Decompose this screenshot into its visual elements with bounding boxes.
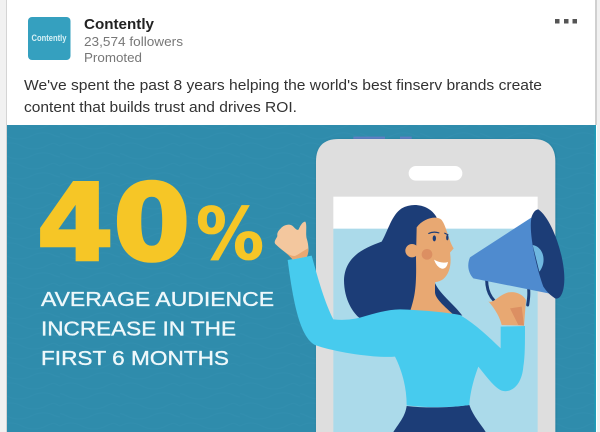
follower count: 23,574 followers	[84, 34, 184, 49]
panel: teal ad background	[7, 125, 596, 432]
icon: more options dots	[555, 19, 577, 24]
post copy: We've spent the past 8 years helping the world's best finserv brands create	[24, 78, 542, 94]
phone	[316, 137, 555, 432]
icon: Contently logo: Contently	[32, 33, 66, 43]
statistic description: INCREASE IN THE	[41, 318, 236, 340]
statistic description: AVERAGE AUDIENCE	[41, 288, 274, 311]
headline statistic 40%: %	[196, 192, 264, 276]
icon: thumbs-up hand	[275, 222, 308, 259]
post copy	[24, 78, 542, 116]
icon: Contently logo	[28, 17, 70, 60]
icon: megaphone	[468, 209, 564, 326]
company name: Contently	[84, 16, 155, 33]
headline statistic 40%	[37, 162, 264, 284]
post copy: content that builds trust and drives ROI.	[24, 100, 297, 116]
statistic description: FIRST 6 MONTHS	[41, 347, 229, 370]
headline statistic 40%: 40	[37, 162, 190, 284]
woman	[288, 205, 525, 432]
statistic description	[41, 288, 274, 370]
illustration: phone and woman with megaphone	[275, 137, 564, 432]
promoted label: Promoted	[84, 50, 142, 65]
